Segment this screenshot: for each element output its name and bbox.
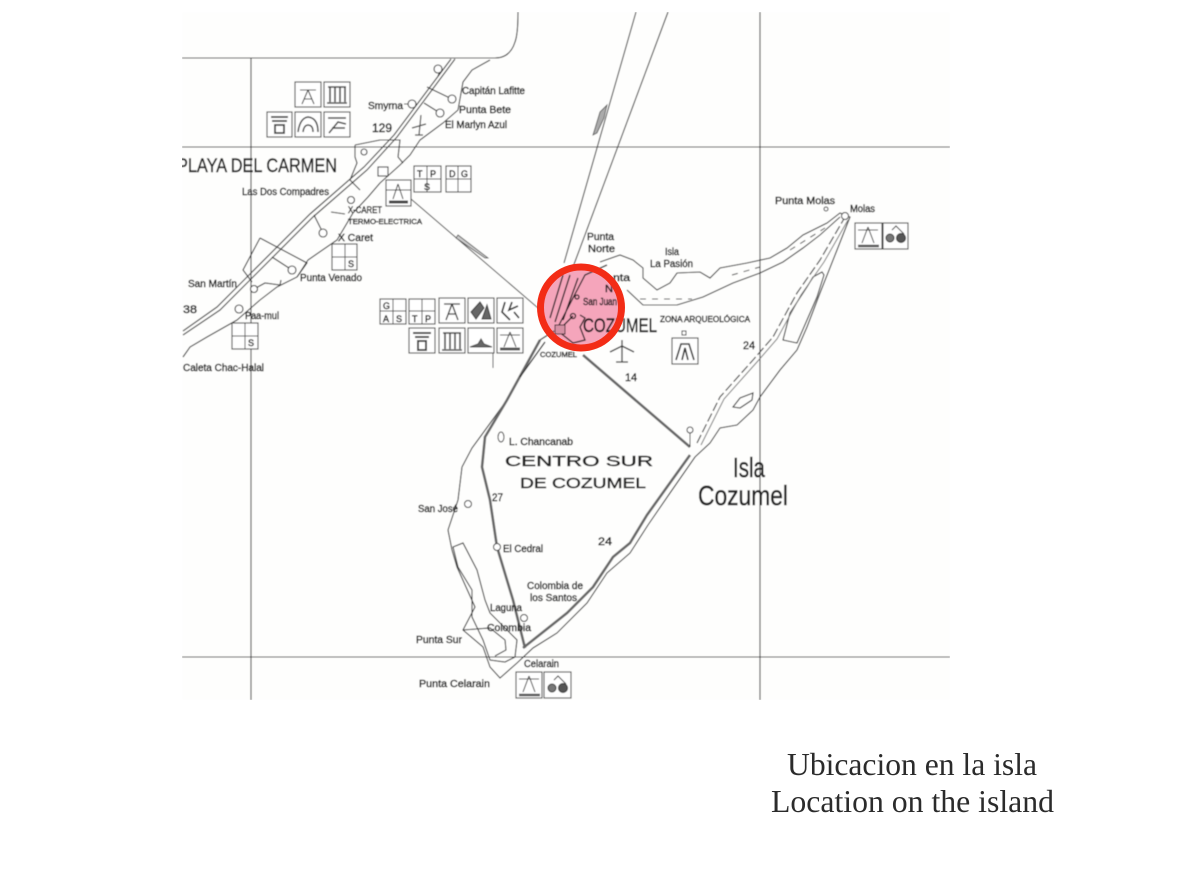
icon: plant pot [267,112,292,137]
icon: fish [497,298,523,323]
northern island labels: 24 [743,340,755,352]
mainland labels: 38 [183,304,197,316]
mainland labels: Punta Bete [459,105,511,116]
mainland labels: TERMO-ELECTRICA [348,217,422,226]
icon: services G A S: G [383,301,390,311]
mainland labels: El Marlyn Azul [445,120,507,131]
mainland labels: X Caret [338,233,373,244]
icon: power plant [386,180,411,206]
mainland labels [177,86,525,374]
Laguna Chancanab [498,432,504,442]
mainland labels: Capitán Lafitte [462,86,525,97]
icon: archaeological zone pyramid [672,331,698,364]
icon: ferry boat north [593,105,607,135]
icon: airport plane [610,340,634,362]
icon: building [324,82,350,107]
icon: museum [439,328,465,353]
icon: services D G: G [461,169,468,179]
northern island labels: Punta Molas [775,196,835,207]
southern island labels: Celarain [524,659,559,670]
southern island labels: Laguna [490,603,522,614]
southern island labels: 24 [598,536,612,548]
Cozumel town roads [520,265,607,377]
southern island labels: L. Chancanab [509,437,573,448]
mainland place markers [235,65,456,313]
mainland labels: San Martín [188,279,237,290]
icon: services T P [409,299,435,324]
Cozumel town marker [555,325,565,334]
cross-island road [583,355,690,447]
island coast, lagoons [448,213,850,678]
northern island labels: Punta [587,232,614,243]
icon: lighthouse Celarain [516,672,542,698]
icon: services T P S [414,166,441,192]
northern island labels: San Juan [583,297,617,308]
east coast road [697,217,845,443]
map labels [177,86,875,690]
southern island labels: Colombia [487,623,531,634]
mainland labels: X-CARET [348,205,382,215]
northern island labels [540,196,875,384]
icon: vertical marker below landscape [492,353,494,368]
northern island labels: COZUMEL [540,350,577,359]
icon: services S Paamul [232,323,258,349]
ferry route from Playa del Carmen [411,199,538,308]
icon: plant pot Cozumel [409,328,435,353]
location highlight circle [540,267,622,348]
icon: services G A S: A [383,314,389,324]
mainland labels: Las Dos Compadres [242,187,329,198]
air routes to Cozumel [564,12,668,267]
northern island labels: Isla [665,247,679,258]
mainland highway [183,59,455,335]
icon: services T P S: T [417,169,423,179]
island ring road [482,340,690,648]
icon: services S X-Caret [332,244,357,270]
southern island labels: CENTRO SUR [505,453,653,470]
road spur marker [464,207,848,622]
lagoon water dashes [640,228,825,299]
icon: services G A S [380,299,406,324]
southern island labels: Isla [733,452,765,483]
northern island labels: Norte [588,244,615,255]
mainland labels: 129 [372,121,392,135]
mainland labels: Caleta Chac-Halal [183,363,264,374]
icon: diver [295,112,321,137]
map background [182,12,950,700]
southern island labels: El Cedral [503,544,543,555]
southern island labels: Cozumel [698,480,788,511]
northern island labels: Molas [850,204,875,215]
icon: beach [324,112,350,137]
mainland labels: Smyrna [368,101,403,112]
icon: palm hut [497,328,523,353]
northern island labels: COZUMEL [583,316,657,337]
mainland coast [183,60,490,357]
icon: services T P: T [412,314,418,324]
northern island labels: nta [613,273,631,284]
mainland labels: PLAYA DEL CARMEN [177,156,337,177]
icon: landscape [468,328,494,353]
Playa del Carmen town outline and side roads [243,69,452,289]
southern island labels: San José [418,504,458,515]
caption: English: Location on the island [771,784,1054,819]
icon: services T P S: S [424,182,430,192]
icon: services S X-Caret: S [348,259,354,269]
icon: tower [295,82,321,107]
caption [771,747,1054,819]
southern island labels: DE COZUMEL [520,475,646,492]
icon: services D G [446,166,471,192]
southern island labels: los Santos [530,593,577,604]
icon: lighthouse Molas [855,223,882,249]
infographic: Cozumel location map [182,12,1054,812]
icon: services D G: D [449,169,456,179]
southern island labels: 27 [492,492,503,504]
northern island labels: N [605,284,613,295]
southern island labels: Punta Celarain [419,679,490,690]
icon: airplane on mainland [412,115,426,135]
icon: ferry boat west [456,235,488,258]
service icon boxes [232,82,908,698]
mainland labels: Paa-mul [245,311,279,322]
northern island labels: La Pasión [650,259,693,270]
southern island labels: Punta Sur [416,635,463,646]
highlight ring [540,267,622,348]
map grid and frame [182,12,950,700]
highlight tint [540,267,622,348]
mainland labels: Punta Venado [300,273,362,284]
southern island labels [416,437,788,690]
icon: tower Cozumel [439,298,465,323]
icon: snorkel Celarain [544,672,571,698]
icon: services G A S: S [396,314,402,324]
icon: snorkel Molas [883,223,908,249]
northern island labels: ZONA ARQUEOLÓGICA [660,315,751,324]
map panel [177,12,950,700]
icon: services T P S: P [430,169,436,179]
icon: services T P: P [425,314,431,324]
icon: snorkel [468,298,494,323]
icon: services S Paamul: S [248,338,254,348]
caption: Spanish: Ubicacion en la isla [787,747,1037,782]
northern island labels: 14 [625,372,637,384]
southern island labels: Colombia de [527,581,583,592]
